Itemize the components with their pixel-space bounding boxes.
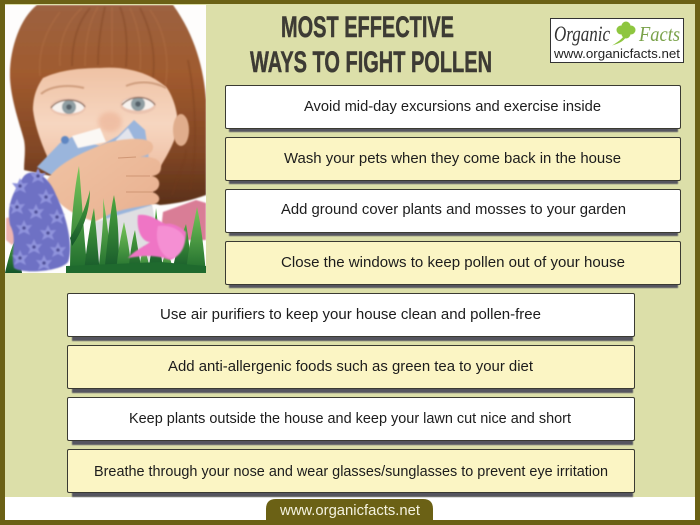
hair strands [40, 7, 167, 88]
tip 7: Keep plants outside the house and keep your lawn cut nice and short [129, 411, 571, 427]
bottom white strip [5, 497, 695, 520]
shirt [160, 200, 206, 240]
tip 1 [226, 86, 680, 132]
title: MOST EFFECTIVE [281, 11, 454, 44]
hyacinth [9, 168, 70, 271]
white garment [96, 204, 164, 264]
tulip [128, 215, 186, 260]
logo: Organic Facts: www.organicfacts.net [553, 46, 680, 61]
finger lines [118, 157, 152, 192]
tip 4: Close the windows to keep pollen out of your house [281, 255, 625, 271]
footer tab with URL [266, 499, 433, 520]
ear [173, 114, 189, 146]
tip 1: Avoid mid-day excursions and exercise inside [304, 99, 601, 115]
footer tab with URL: www.organicfacts.net [279, 503, 420, 519]
title: WAYS TO FIGHT POLLEN [250, 46, 492, 79]
tip 6: Add anti-allergenic foods such as green tea to your diet [168, 359, 533, 375]
tip 5 [68, 294, 634, 341]
tip 6 [68, 346, 634, 393]
right eye [120, 96, 156, 114]
tip 7 [68, 398, 634, 445]
left eye [50, 98, 86, 116]
logo: Organic Facts: Facts [638, 22, 680, 46]
title [250, 11, 492, 79]
icon: clover [612, 22, 636, 46]
tip 3 [226, 190, 680, 236]
tip 3: Add ground cover plants and mosses to your garden [281, 202, 626, 218]
tip 4 [226, 242, 680, 288]
tip 8 [68, 450, 634, 497]
tip 5: Use air purifiers to keep your house clean and pollen-free [160, 307, 541, 323]
hair [10, 5, 206, 205]
tip 2 [226, 138, 680, 184]
pink flower behind hyacinth [5, 216, 15, 246]
eyebrows [41, 82, 166, 94]
photo: child covering nose among flowers [5, 5, 206, 273]
tissue [36, 120, 152, 220]
grass [5, 166, 206, 273]
tip 2: Wash your pets when they come back in the house [284, 151, 621, 167]
hand [47, 139, 161, 222]
nose and cheek shading [98, 112, 122, 132]
tip 8: Breathe through your nose and wear glasses/sunglasses to prevent eye irritation [94, 464, 608, 480]
logo: Organic Facts: Organic [554, 21, 610, 46]
logo: Organic Facts [550, 18, 684, 62]
face [33, 68, 178, 180]
